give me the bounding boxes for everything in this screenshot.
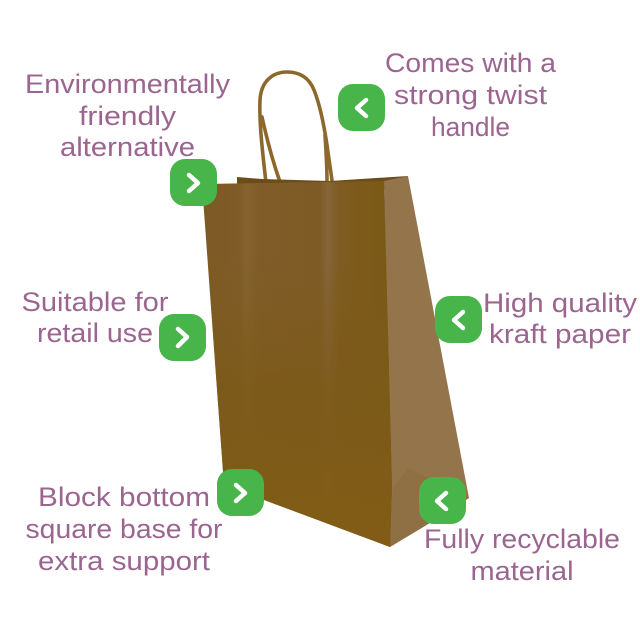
bag side panel — [384, 176, 469, 547]
icon: left arrow button, kraft paper — [435, 296, 482, 343]
callout: twist handle: strong twist — [394, 80, 548, 110]
bag back inner rim — [237, 176, 408, 190]
illustration: kraft paper bag — [202, 72, 469, 547]
icon: right arrow button, block bottom — [217, 469, 264, 516]
callout: environmentally friendly alternative — [25, 69, 231, 162]
bag front panel — [202, 181, 392, 547]
callout: high quality kraft paper: High quality — [483, 288, 638, 318]
callout: high quality kraft paper: kraft paper — [489, 319, 631, 349]
callout: suitable for retail use: retail use — [37, 318, 153, 348]
icon: right arrow button, retail use — [159, 314, 206, 361]
callout: suitable for retail use — [22, 287, 168, 348]
icon: left arrow button, twist handle — [338, 84, 385, 131]
icon: left arrow button, recyclable — [419, 477, 466, 524]
callout: fully recyclable material: Fully recyclable — [424, 524, 620, 554]
callout: block bottom square base: extra support — [38, 546, 211, 576]
callout: block bottom square base: Block bottom — [38, 482, 210, 512]
callout: environmentally friendly alternative: alternative — [60, 132, 195, 162]
callout: environmentally friendly alternative: Environmentally — [25, 69, 231, 99]
callout: block bottom square base: square base for — [26, 514, 222, 544]
icon: right arrow button, environmentally friendly — [170, 159, 217, 206]
callout: suitable for retail use: Suitable for — [22, 287, 168, 317]
callout: block bottom square base — [26, 482, 222, 576]
callout: twist handle: handle — [431, 112, 510, 142]
callout: twist handle: Comes with a — [385, 48, 557, 78]
callout: high quality kraft paper — [483, 288, 638, 349]
callout: fully recyclable material — [424, 524, 620, 586]
callout: fully recyclable material: material — [470, 556, 574, 586]
bag handle — [260, 72, 332, 183]
callout: environmentally friendly alternative: friendly — [79, 101, 177, 131]
callout: twist handle — [385, 48, 557, 142]
